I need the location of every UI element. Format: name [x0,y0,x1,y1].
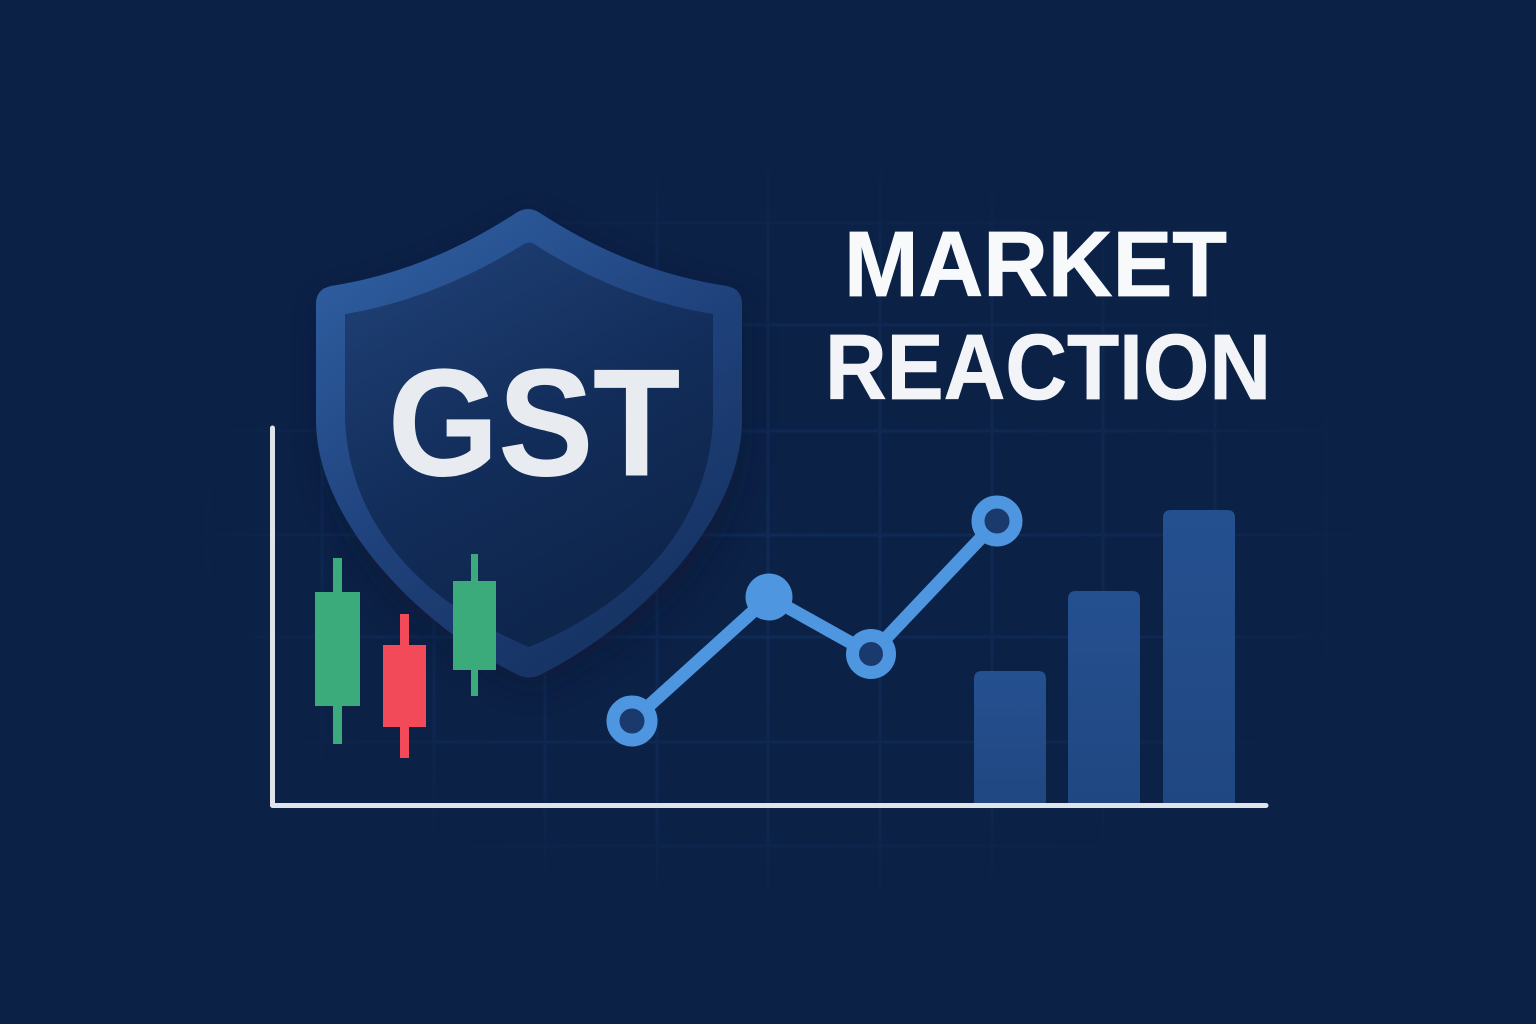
candle: red middle [383,614,426,758]
point 3 [852,636,890,672]
line chart [613,502,1016,740]
point 4 [978,502,1016,540]
candlestick chart [315,554,496,758]
title: Market Reaction: REACTION [825,315,1271,419]
candle: green left [315,558,360,744]
shield inner face [345,242,713,647]
candle: green right [453,554,496,696]
chart axes [272,428,1266,806]
title: Market Reaction [825,212,1271,419]
shield outer rim [316,209,742,678]
bar chart [974,510,1235,803]
bar 2 [1068,591,1140,803]
bar 1 [974,671,1046,803]
point 1 [613,702,651,740]
trend line [632,521,997,721]
shield shadow [326,222,742,686]
point 2 [746,574,792,620]
shield label: GST [388,338,680,508]
icon: GST shield [316,209,742,678]
title: Market Reaction: MARKET [844,212,1227,316]
bar 3 [1163,510,1235,803]
